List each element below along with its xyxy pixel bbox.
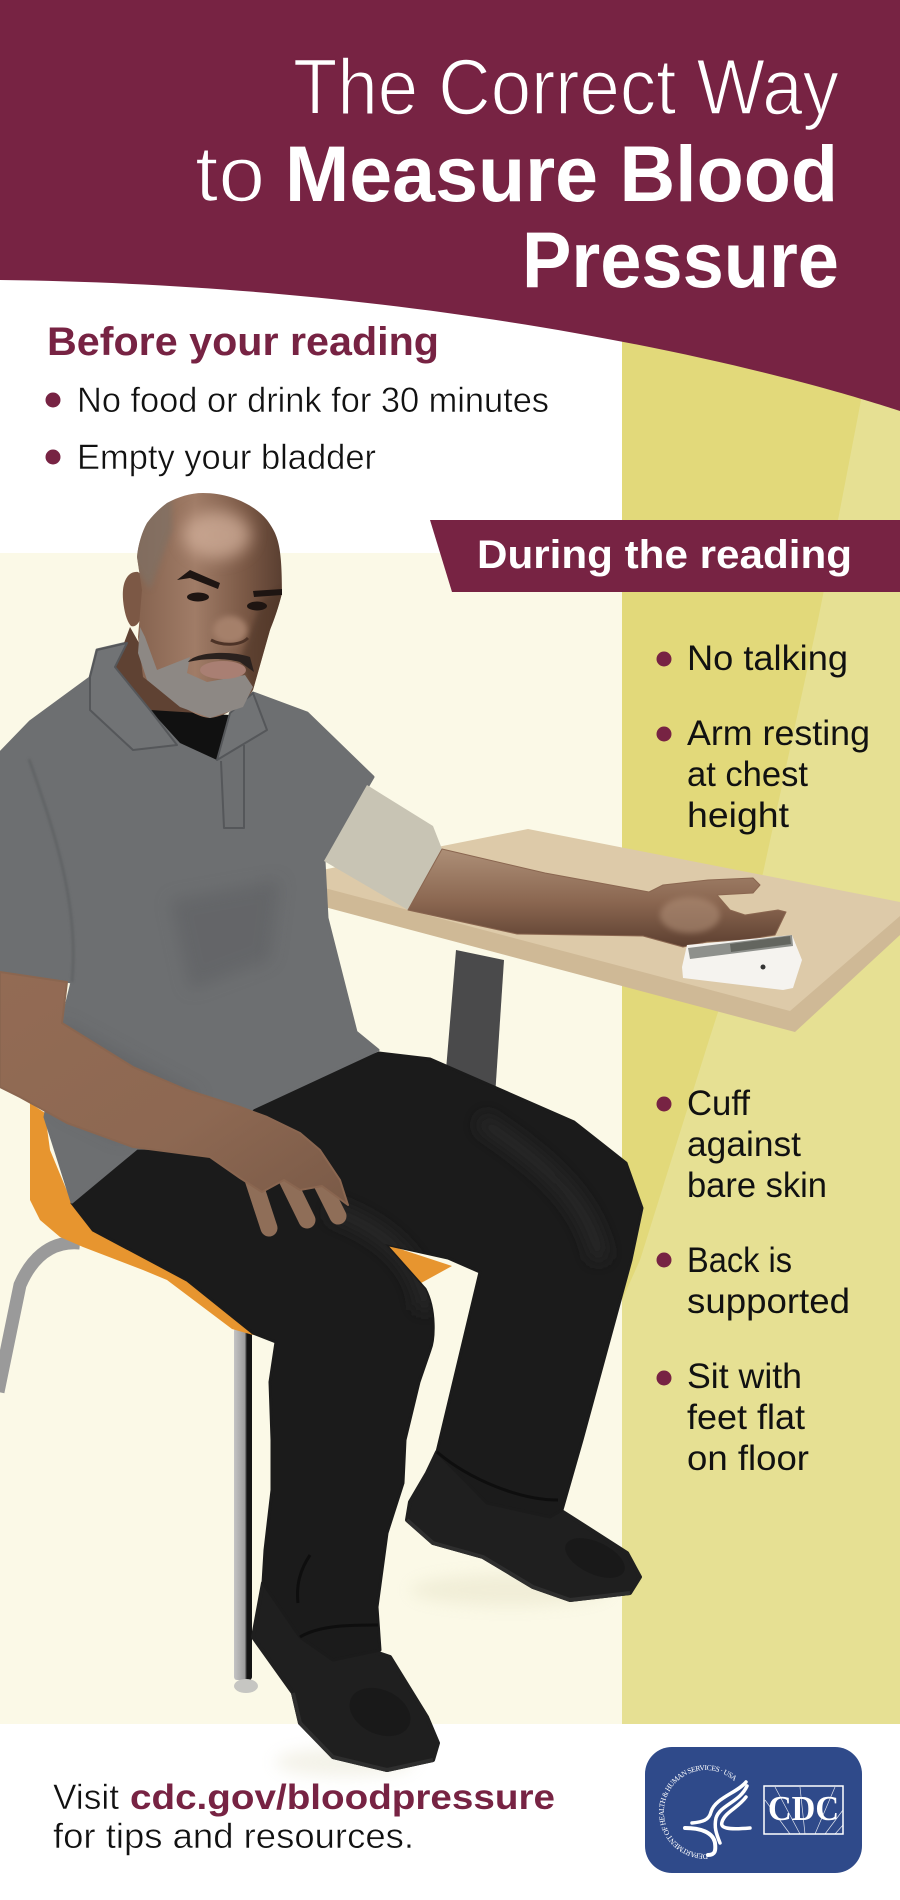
CDC box: CDC [768, 1789, 839, 1828]
title: Pressure [522, 215, 839, 304]
black undershirt [150, 710, 230, 760]
logo: HHS and CDC [645, 1747, 862, 1873]
bullet: no talking: No talking [687, 639, 848, 678]
header curved band [0, 0, 900, 411]
table [317, 829, 900, 1032]
neck skin [115, 627, 210, 722]
background: yellow panel [622, 300, 900, 1724]
face shading, clipped to head [137, 500, 282, 694]
bullet: arm resting at chest height [656, 714, 870, 835]
bullet: arm resting at chest height: at chest [687, 755, 808, 794]
bullet: arm resting at chest height: height [687, 796, 789, 835]
background: cream panel [0, 553, 622, 1724]
fingers [250, 1160, 338, 1228]
shirt shading [182, 890, 270, 976]
bullet: empty your bladder: Empty your bladder [77, 438, 376, 477]
head [123, 493, 290, 718]
bullet: cuff against bare skin: against [687, 1125, 801, 1164]
bullet: cuff against bare skin: Cuff [687, 1084, 750, 1123]
bullet: sit with feet flat on floor: on floor [687, 1439, 809, 1478]
bullet: back is supported [656, 1241, 850, 1321]
trousers [72, 1053, 642, 1660]
heading: before your reading: Before your reading [47, 320, 439, 364]
title [195, 42, 839, 304]
collar [90, 643, 267, 828]
background: lighter yellow wedge [622, 380, 900, 1724]
person, chair and table photo illustration [0, 493, 900, 1776]
bullet: no food or drink: No food or drink for 30 minutes [77, 381, 549, 420]
title: to [195, 129, 265, 218]
front shoe [253, 1583, 438, 1770]
bullet: sit with feet flat on floor: Sit with [687, 1357, 802, 1396]
lips [200, 661, 246, 679]
eyes and brows [177, 570, 282, 610]
back shoe [407, 1452, 640, 1600]
bullet: back is supported: Back is [687, 1241, 792, 1280]
footer text: for tips and resources. [53, 1817, 414, 1856]
blood pressure cuff [324, 785, 442, 910]
section: before your reading [46, 320, 549, 477]
blood pressure monitor [682, 935, 802, 990]
nose [211, 616, 248, 644]
moustache [188, 653, 254, 672]
arm on table [408, 849, 786, 947]
face [137, 493, 282, 718]
chair seat [30, 1103, 452, 1335]
title: The Correct Way [293, 42, 839, 131]
table leg [445, 950, 504, 1112]
palm highlight [660, 897, 720, 933]
HHS seal ring text: DEPARTMENT OF HEALTH & HUMAN SERVICES · USA [658, 1765, 736, 1859]
title: Measure Blood [285, 129, 838, 218]
sleeve seam [29, 759, 73, 982]
chair front leg [234, 1328, 258, 1693]
bullet: cuff against bare skin: bare skin [687, 1166, 827, 1205]
chair back leg [0, 1243, 80, 1392]
beard [138, 627, 253, 718]
bullet: sit with feet flat on floor: feet flat [687, 1398, 805, 1437]
bullet: arm resting at chest height: Arm resting [687, 714, 870, 753]
section banner: during the reading [430, 520, 900, 592]
footer text: Visit [53, 1778, 119, 1817]
lap arm and hand [0, 972, 348, 1228]
bullet: sit with feet flat on floor [656, 1357, 809, 1478]
footer text [53, 1778, 555, 1856]
bullet: cuff against bare skin [656, 1084, 827, 1205]
floor shadows [275, 1574, 610, 1776]
footer text: cdc.gov/bloodpressure [130, 1778, 555, 1817]
ear [123, 572, 146, 626]
bullet: back is supported: supported [687, 1282, 850, 1321]
section banner: during the reading: During the reading [477, 533, 852, 577]
HHS eagle mark [685, 1782, 750, 1855]
torso shirt [0, 643, 378, 1202]
